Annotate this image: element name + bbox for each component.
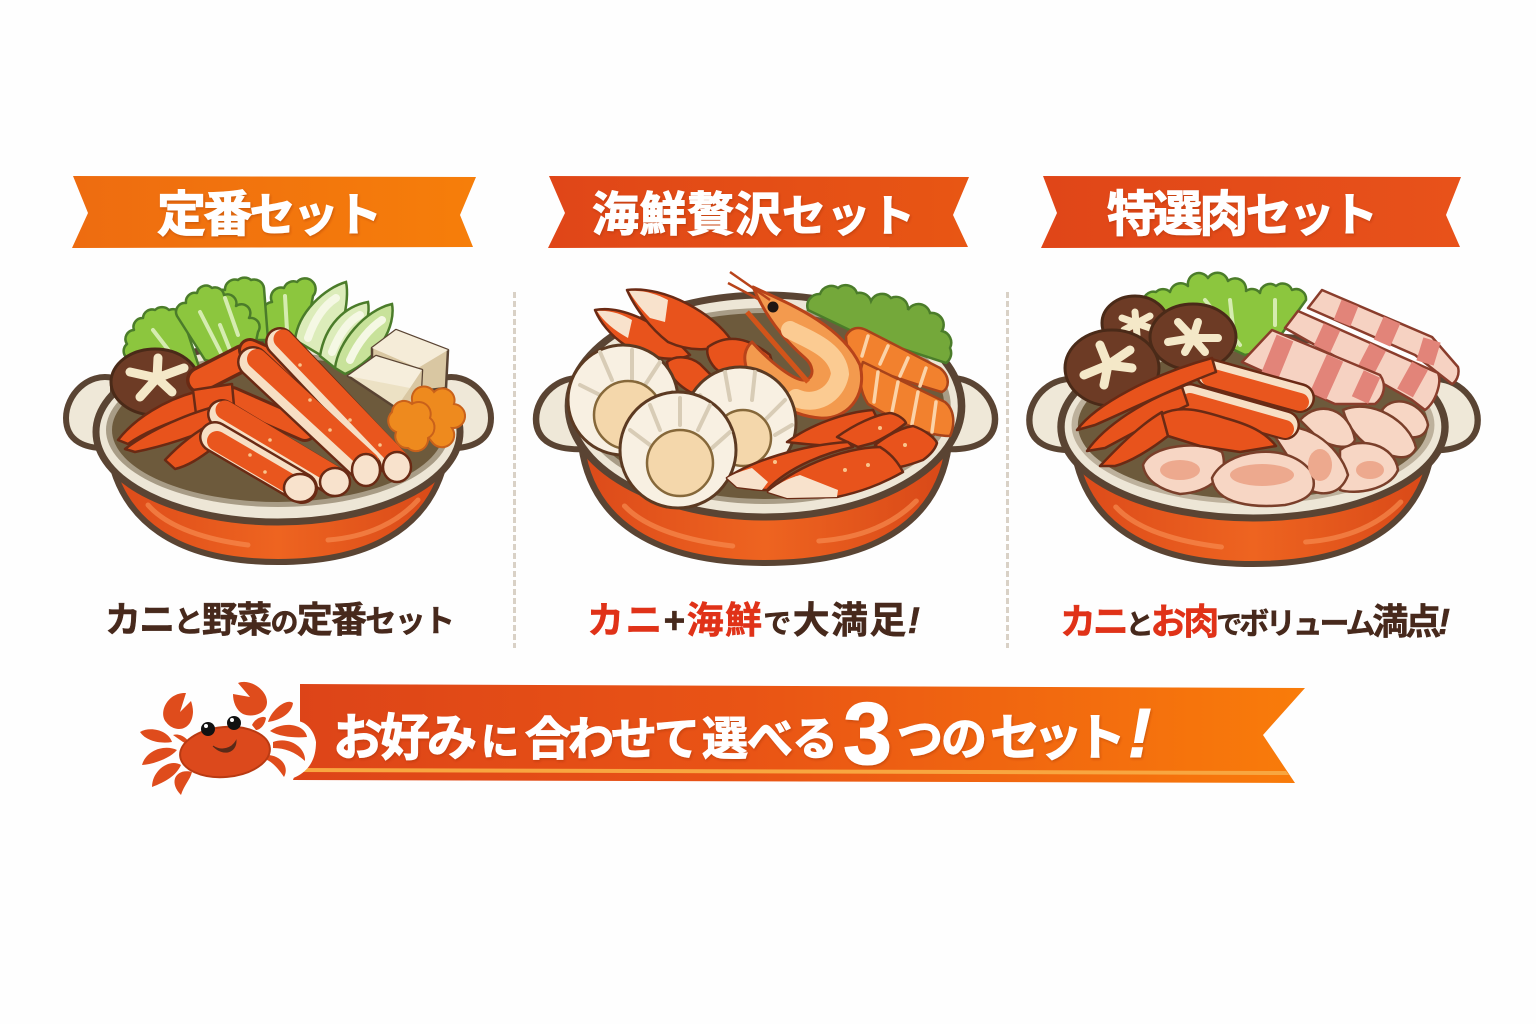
ribbon headline: に (481, 722, 519, 764)
ribbon headline (333, 684, 1151, 783)
caption: 特選肉セット: カニとお肉でボリューム満点! (1060, 601, 1450, 642)
shrimp (728, 272, 862, 418)
crab legs (118, 339, 411, 502)
lettuce (807, 285, 951, 363)
panel: 特選肉セット pot illustration (1029, 273, 1478, 564)
divider left (513, 292, 516, 648)
pot base (1029, 336, 1478, 564)
white halo (255, 721, 316, 782)
lettuce (124, 278, 316, 370)
banner: 特選肉セット (1041, 176, 1461, 248)
lettuce (1143, 273, 1306, 355)
eyes (201, 722, 215, 736)
ribbon headline: 3 (843, 684, 892, 783)
icon: crab mascot (140, 682, 316, 795)
pork rolls (1242, 290, 1459, 410)
ribbon headline: ! (1128, 694, 1151, 772)
banner: 海鮮贅沢セット: 海鮮贅沢セット (592, 188, 915, 241)
crab legs (140, 702, 307, 795)
banner: 定番セット: 定番セット (157, 188, 382, 242)
ribbon headline: 選べる (702, 713, 838, 765)
salmon (846, 328, 953, 436)
banner: 定番セット (72, 176, 476, 248)
scallops (568, 345, 796, 508)
caption: 海鮮贅沢セット: カニ+海鮮で大満足! (587, 600, 920, 641)
ribbon headline: つの (897, 713, 987, 765)
divider right (1006, 292, 1009, 648)
shiitake (1065, 296, 1236, 406)
smile (213, 741, 236, 752)
shiitake (111, 349, 199, 415)
chicken (1143, 401, 1428, 506)
pot base (536, 295, 995, 563)
crab claws (595, 289, 782, 396)
claws (163, 693, 193, 729)
crab legs (1077, 358, 1300, 466)
bottom ribbon (293, 684, 1305, 783)
carrot flowers (388, 386, 465, 451)
green onion (295, 282, 393, 374)
pot base (66, 342, 491, 562)
panel: 定番セット pot illustration (66, 278, 491, 562)
crab body (178, 723, 272, 781)
panel: 海鮮贅沢セット pot illustration (536, 272, 995, 563)
ribbon headline: お好み (333, 710, 477, 766)
ribbon headline: 合わせて (525, 713, 700, 765)
banner: 特選肉セット: 特選肉セット (1107, 188, 1378, 242)
caption: 定番セット: カニと野菜の定番セット (105, 599, 455, 640)
crab pieces (727, 410, 937, 498)
banner: 海鮮贅沢セット (548, 176, 969, 248)
ribbon headline: セット (990, 710, 1126, 766)
tofu (348, 330, 448, 408)
